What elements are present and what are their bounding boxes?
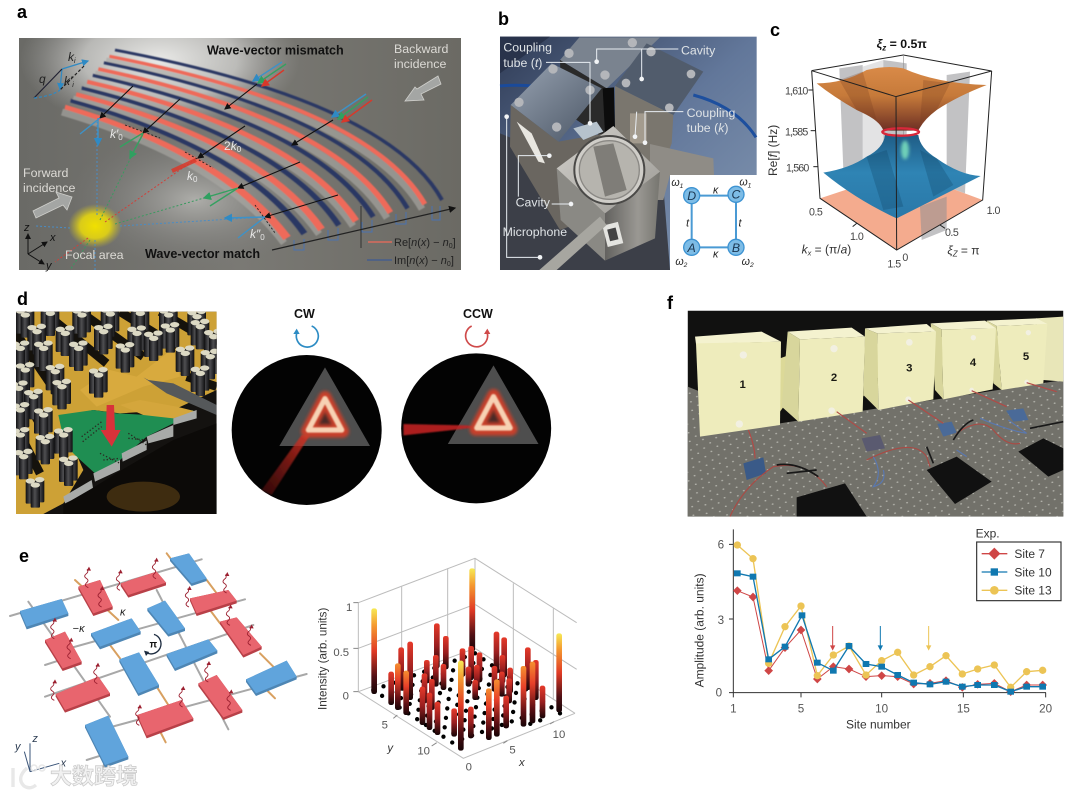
panel a text labels: k — [187, 169, 194, 183]
tick labels: 0.5 — [809, 207, 823, 219]
watermark — [13, 759, 138, 791]
y axis label: Re[f] (Hz) — [766, 125, 780, 176]
strip end cross-sections — [294, 206, 440, 250]
tick labels: 10 — [553, 729, 565, 741]
icon: clockwise arrow — [293, 326, 318, 347]
chart: intensity bars — [316, 558, 577, 774]
orange slice shading — [839, 72, 950, 123]
photograph of foam cavities — [688, 311, 1063, 517]
panel a text labels: k″ — [250, 227, 261, 241]
tick labels: 1 — [346, 602, 352, 614]
small right block — [650, 144, 714, 200]
axis tick labels: 3 — [718, 614, 724, 627]
panel a text labels: ] — [453, 237, 456, 249]
coupling labels — [73, 606, 126, 635]
tick marks — [353, 603, 554, 746]
axis titles: Amplitude (arb. units) — [693, 573, 707, 687]
tick labels: 1,610 — [785, 86, 808, 98]
xyz axes — [28, 234, 47, 264]
red arrow — [101, 405, 121, 447]
four-site lattice inset: ω — [675, 256, 684, 268]
band surfaces in bounding box — [766, 37, 1001, 270]
x axis labels: a) — [841, 242, 851, 256]
slice shadows on blue — [867, 150, 953, 210]
cavity numbers: 2 — [831, 372, 837, 384]
axis tick labels: 1 — [730, 702, 737, 715]
tick labels: 0 — [343, 690, 349, 702]
upper orange surface — [817, 67, 987, 131]
floor dots — [373, 653, 560, 748]
panel a text labels — [23, 42, 456, 268]
dark gaps between boards — [16, 312, 217, 473]
legend: Site 13 — [1014, 584, 1052, 598]
tick labels: 1.0 — [987, 205, 1001, 217]
legend lines — [367, 242, 392, 260]
annotation text — [503, 41, 735, 239]
four-site lattice inset: D — [687, 189, 696, 203]
axis tick labels: 6 — [718, 539, 724, 552]
intensity bars back to front — [371, 568, 562, 751]
legend — [976, 526, 1061, 601]
lattice schematic — [10, 553, 307, 772]
probe — [143, 377, 217, 415]
axis letters: x — [49, 232, 56, 244]
annotation dots — [504, 59, 647, 260]
label d: d — [17, 289, 28, 309]
x axis labels: = π — [958, 243, 980, 257]
series: site 7 — [733, 586, 1047, 696]
four-site lattice inset: B — [732, 241, 740, 255]
four-site lattice inset: t — [739, 218, 743, 230]
panel a text labels: Re[n(x) − n — [394, 237, 449, 249]
legend: Site 7 — [1014, 547, 1045, 561]
panel a text labels: i — [72, 82, 74, 89]
incidence arrows — [33, 76, 441, 218]
cavity numbers: 5 — [1023, 351, 1029, 363]
label b: b — [498, 9, 509, 29]
panel a text labels: 0 — [193, 175, 198, 184]
four-site lattice inset: 2 — [683, 262, 688, 269]
cavity numbers — [740, 352, 1029, 388]
photograph of cavities — [500, 37, 757, 271]
peach floor — [820, 171, 983, 250]
x axis labels: k — [802, 242, 809, 256]
CW heading: CW — [294, 307, 315, 321]
tick labels: 1,560 — [786, 162, 809, 174]
annotation text: Coupling — [503, 41, 552, 55]
four-site lattice inset: κ — [713, 248, 719, 260]
panel a text labels: incidence — [394, 57, 446, 71]
panel e: coupled resonator lattice — [10, 546, 577, 774]
CCW ring image — [401, 353, 551, 503]
annotation text: tube (k) — [687, 121, 728, 135]
four-site lattice inset: A — [687, 241, 696, 255]
photograph of circuit lattice — [9, 305, 223, 514]
grey background — [19, 38, 461, 270]
CW ring image — [232, 355, 382, 505]
panel a text labels: k′ — [64, 74, 72, 88]
panel a text labels: i — [74, 58, 76, 65]
axis letters: x — [518, 757, 525, 769]
panel a text labels: incidence — [23, 181, 75, 195]
pi flux loop — [144, 634, 161, 656]
panel a text labels: Backward — [394, 42, 449, 56]
panel a text labels: 0 — [118, 133, 123, 142]
blue and red resonator blocks — [20, 553, 297, 768]
pin headers — [82, 422, 147, 463]
tick labels: 0.5 — [333, 647, 349, 659]
tick labels: 5 — [382, 719, 388, 731]
black batteries — [797, 438, 1063, 517]
axis tick labels: 5 — [798, 702, 804, 715]
cavity numbers: 4 — [970, 357, 977, 369]
axis titles: Site number — [846, 717, 911, 731]
panel c: 3D band surface chart — [766, 20, 1001, 270]
axis tick labels — [716, 539, 1053, 715]
chart title: = 0.5π — [886, 37, 927, 51]
axis letters — [23, 222, 56, 272]
x axis labels: Z — [952, 250, 959, 259]
panel a text labels: 0 — [447, 261, 451, 268]
sensors and circuit boards — [743, 408, 1028, 480]
microphone tube — [539, 217, 607, 270]
black incident arrows — [100, 84, 338, 217]
inset white cutout — [670, 175, 757, 271]
four-site lattice inset: ω — [739, 176, 748, 188]
cavity blocks — [695, 317, 1063, 437]
axis letters: y — [386, 743, 394, 755]
arrowheads — [830, 645, 931, 651]
axis letters — [386, 743, 525, 769]
four-site lattice inset: t — [686, 218, 690, 230]
axis letters: y — [14, 741, 22, 753]
axes — [729, 529, 1046, 697]
panel a text labels: q — [39, 72, 46, 86]
tick labels: 10 — [417, 745, 430, 757]
x axis labels: = (π/ — [811, 242, 841, 256]
panel a text labels: Wave-vector match — [145, 247, 260, 261]
panel a text labels: Focal area — [65, 248, 124, 262]
axis ticks — [808, 90, 945, 228]
annotation text: tube (t) — [503, 56, 542, 70]
annotation text: Cavity — [516, 196, 551, 210]
four-site lattice inset: 1 — [748, 182, 752, 189]
site markers arrows — [833, 626, 929, 647]
exceptional ring — [882, 128, 919, 136]
axis tick labels: 10 — [875, 702, 889, 715]
x axis labels: ξ — [947, 243, 953, 257]
connecting tubes — [780, 335, 1000, 412]
axis letters — [14, 733, 67, 770]
CCW heading: CCW — [463, 307, 493, 321]
vector triangle inset — [34, 61, 88, 98]
focal glow — [68, 204, 122, 248]
panel a text labels: Forward — [23, 166, 69, 180]
chart title: z — [881, 44, 886, 53]
cylinder groups — [9, 305, 223, 508]
label a: a — [17, 2, 28, 22]
tick labels: 1.0 — [850, 231, 864, 243]
annotation text: Cavity — [681, 43, 716, 57]
axis letters: z — [31, 733, 38, 745]
annotation text: Microphone — [503, 225, 567, 239]
axis tick labels: 20 — [1039, 702, 1053, 715]
coupling labels: −κ — [73, 623, 85, 635]
dotted rays from focal area — [36, 122, 265, 270]
coloured reflected arrows — [80, 62, 372, 238]
pi flux loop: π — [150, 640, 158, 651]
x axis labels — [802, 242, 980, 259]
tick labels: 0 — [902, 252, 908, 264]
wavy emission arrows — [51, 558, 254, 725]
four-site lattice inset: C — [732, 188, 741, 202]
legend: Site 10 — [1014, 565, 1052, 579]
rear right cavity — [615, 43, 703, 200]
screws — [514, 38, 695, 132]
axis letters: y — [45, 260, 53, 272]
tick labels: 1.5 — [887, 258, 901, 270]
axis letters: x — [60, 758, 67, 770]
grey slice planes — [839, 60, 970, 240]
panel d: photonic lattice photo and ring images — [9, 289, 551, 514]
four-site lattice inset: κ — [713, 185, 719, 197]
curved gain-loss strips — [62, 49, 444, 243]
panel a text labels: 0 — [260, 233, 265, 242]
panel a text labels: 0 — [237, 145, 242, 154]
four-site lattice inset: 1 — [680, 183, 684, 190]
four-site lattice inset: ω — [671, 177, 680, 189]
watermark logo — [13, 765, 45, 788]
tick labels: 0.5 — [945, 227, 959, 239]
dashed tangents and baseline — [125, 125, 455, 250]
series: site 13 — [734, 541, 1046, 691]
tick labels — [785, 86, 1001, 270]
top rear cavity — [560, 37, 660, 140]
panel a text labels: k′ — [110, 127, 119, 141]
CW heading — [293, 307, 318, 347]
tick labels: 5 — [509, 744, 516, 756]
panel a text labels: 2k — [224, 139, 237, 153]
panel a text labels: k — [68, 50, 74, 64]
front cavity — [557, 126, 660, 261]
axis tick labels: 15 — [957, 702, 970, 715]
four-site lattice inset — [671, 176, 754, 269]
panel a text labels: Im[n(x) − n — [394, 255, 447, 267]
cavity numbers: 3 — [906, 363, 912, 375]
lower blue surface — [823, 135, 981, 218]
chart walls — [358, 558, 577, 758]
chart title: ξ — [877, 37, 884, 51]
y axis label: Intensity (arb. units) — [316, 608, 329, 710]
panel a text labels: 0 — [449, 243, 453, 250]
watermark text: 大数跨境 — [50, 759, 138, 791]
series: site 10 — [734, 570, 1046, 695]
speaker knobs — [736, 330, 1031, 428]
legend: Exp. — [976, 526, 1000, 540]
front box edges — [812, 71, 992, 250]
panel b: acoustic cavity photograph — [498, 9, 757, 271]
xyz axes — [24, 743, 59, 772]
connecting rods — [10, 553, 307, 767]
axis tick labels: 0 — [716, 687, 723, 700]
x axis labels: x — [807, 249, 812, 258]
rear box edges — [812, 55, 992, 71]
annotation leader lines — [507, 49, 683, 257]
panel a: wave-vector matching metasurface — [17, 0, 461, 272]
four-site lattice inset: 2 — [749, 262, 754, 269]
line chart: amplitude vs site number — [693, 526, 1061, 731]
tick labels: 1,585 — [785, 126, 808, 138]
coupling labels: κ — [120, 606, 126, 618]
label e: e — [19, 546, 29, 566]
icon: counter-clockwise arrow — [466, 326, 490, 347]
cavity numbers: 1 — [740, 379, 746, 391]
axis titles — [693, 573, 911, 731]
CCW heading — [463, 307, 493, 347]
annotation text: Coupling — [687, 106, 735, 120]
black gap — [603, 87, 615, 133]
panel a text labels: Wave-vector mismatch — [207, 44, 344, 58]
label f: f — [667, 293, 674, 313]
metal connector — [573, 122, 603, 140]
panel a text labels: ] — [451, 255, 454, 267]
label c: c — [770, 20, 780, 40]
left cavity — [510, 63, 605, 230]
four-site lattice inset: ω — [742, 256, 750, 268]
blue surface highlight — [901, 141, 909, 159]
wires — [730, 383, 1063, 517]
panel f: acoustic chain photo and amplitude chart — [667, 293, 1063, 731]
axis letters: z — [23, 222, 30, 234]
tick labels — [333, 602, 565, 774]
tick labels: 0 — [466, 762, 472, 774]
